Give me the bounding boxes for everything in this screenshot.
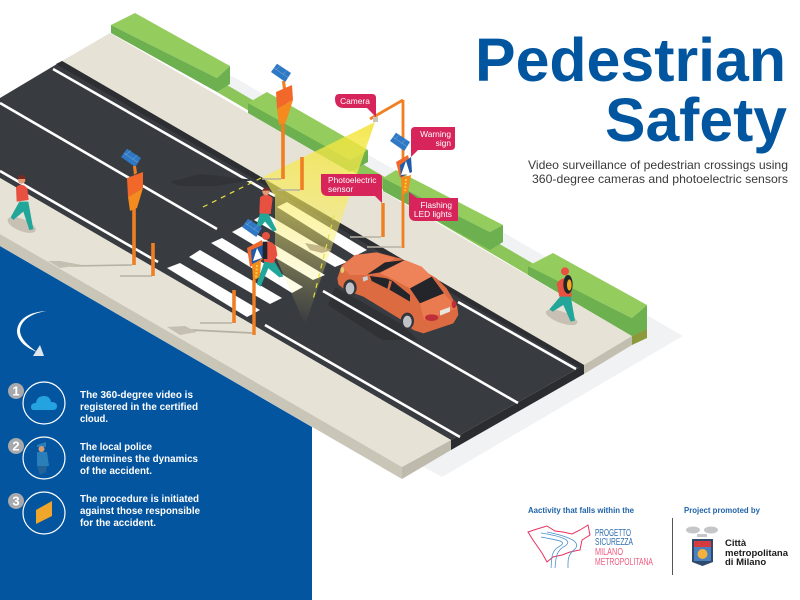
- callout: photoelectric sensor: sensor: [328, 184, 353, 194]
- road shadow: [170, 174, 255, 186]
- step 2 text: The local police: [80, 442, 152, 453]
- step 2 badge: [8, 438, 24, 454]
- road markings: [0, 69, 576, 437]
- step 3 text: [80, 494, 200, 529]
- step 1: [8, 382, 198, 425]
- wordmark: di Milano: [725, 557, 766, 568]
- logo wordmark: MILANO: [595, 547, 623, 558]
- pedestrian left sidewalk: [6, 175, 38, 236]
- road edge band upper: [56, 61, 584, 368]
- arrow: curved: [17, 311, 47, 356]
- callout: photoelectric sensor: Photoelectric: [328, 175, 376, 185]
- icon: folder: [36, 501, 52, 524]
- upper sidewalk end face: [584, 336, 632, 374]
- logo wordmark: SICUREZZA: [595, 537, 633, 548]
- step 2 text: of the accident.: [80, 466, 152, 477]
- logo: Progetto Sicurezza: [528, 525, 653, 568]
- sign C with solar panel: [167, 219, 265, 335]
- title: [475, 26, 787, 154]
- zebra crossing: [167, 202, 367, 317]
- pedestrian on crossing: [257, 232, 283, 287]
- step 1 badge: 1: [12, 384, 20, 398]
- step 1 text: cloud.: [80, 414, 108, 425]
- wordmark: Città: [725, 538, 747, 549]
- step 3: [8, 492, 200, 534]
- sign module: [127, 172, 143, 197]
- title: Pedestrian: [475, 26, 786, 94]
- camera light beam: [263, 122, 375, 325]
- car shadow on road: [328, 287, 418, 340]
- step 1 circle: [23, 382, 65, 424]
- icon: police officer: [37, 442, 49, 475]
- step 1 badge: [8, 383, 24, 399]
- upper sidewalk: [62, 33, 632, 365]
- hedge 2: [248, 92, 368, 172]
- step 2 text: [80, 442, 198, 477]
- logo caption: project: Project promoted by: [684, 506, 761, 515]
- solar panel: [121, 149, 141, 167]
- blue panel: [0, 246, 312, 600]
- callout: warning sign: sign: [436, 138, 451, 148]
- step 3 text: The procedure is initiated: [80, 494, 199, 505]
- dashed detection line: [203, 177, 334, 300]
- step 3 text: against those responsible: [80, 506, 200, 517]
- step 3 text: for the accident.: [80, 518, 156, 529]
- hedge 3: [383, 170, 503, 250]
- icon: cloud: [31, 396, 57, 410]
- step 2: [8, 437, 198, 479]
- callout: camera: [335, 94, 376, 117]
- shield: [692, 539, 713, 566]
- wordmark: [725, 538, 789, 568]
- callout: photoelectric sensor: [321, 174, 382, 203]
- plate: [440, 307, 450, 316]
- step 3 circle: [23, 492, 65, 534]
- logo wordmark: [595, 528, 653, 568]
- crown: [686, 526, 718, 537]
- title: Safety: [605, 86, 787, 154]
- step 3 badge: 3: [12, 494, 20, 508]
- step 2 text: determines the dynamics: [80, 454, 198, 465]
- logo wordmark: PROGETTO: [595, 528, 631, 539]
- pole B with sign and solar panel: [262, 64, 302, 190]
- step 2 badge: 2: [12, 438, 20, 454]
- road surface: [0, 61, 584, 440]
- step 2 circle: [23, 437, 65, 479]
- camera: [373, 117, 378, 122]
- pole A with sign and solar panel: [48, 149, 153, 276]
- pedestrian right sidewalk: [544, 267, 579, 328]
- subtitle: Video surveillance of pedestrian crossings using: [528, 158, 788, 172]
- lower curb: [0, 234, 402, 479]
- step 3 badge: [8, 493, 24, 509]
- camera pole: [350, 100, 412, 248]
- hedges: [111, 13, 647, 345]
- orange car: [337, 252, 458, 333]
- ground shadow plate: [230, 75, 683, 477]
- tail lights: [425, 314, 438, 321]
- logo: Città metropolitana di Milano: [686, 526, 789, 568]
- pedestrian behind crossing: [257, 188, 277, 232]
- headlight: [340, 267, 344, 273]
- step 1 text: The 360-degree video is: [80, 390, 193, 401]
- subtitle: 360-degree cameras and photoelectric sensors: [532, 172, 788, 186]
- callout: warning sign: Warning: [420, 129, 451, 139]
- pole shadows: [70, 265, 152, 276]
- beam shadow on crossing: [305, 243, 332, 253]
- map outline: [528, 525, 590, 562]
- road end face: [451, 365, 584, 450]
- callout: flashing LED lights: LED lights: [414, 209, 452, 219]
- logo caption: activity: Aactivity that falls within the: [528, 506, 635, 515]
- step 1 text: [80, 390, 198, 425]
- wordmark: metropolitana: [725, 548, 789, 559]
- subtitle: [528, 158, 788, 186]
- lower sidewalk: [0, 178, 451, 467]
- callout: camera: Camera: [340, 96, 370, 106]
- callout: flashing LED lights: [409, 192, 458, 221]
- step 1 text: registered in the certified: [80, 402, 198, 413]
- callout: flashing LED lights: Flashing: [420, 200, 452, 210]
- wheels: [343, 279, 357, 296]
- street scene base: [0, 33, 647, 479]
- road curves: [541, 532, 577, 568]
- logo wordmark: METROPOLITANA: [595, 557, 653, 568]
- hedge 4: [528, 253, 647, 345]
- grass strip: [217, 85, 647, 336]
- callout: warning sign: [411, 127, 455, 157]
- lower curb end face: [402, 440, 451, 479]
- hedge 1: [111, 13, 230, 92]
- logo divider: [672, 518, 673, 575]
